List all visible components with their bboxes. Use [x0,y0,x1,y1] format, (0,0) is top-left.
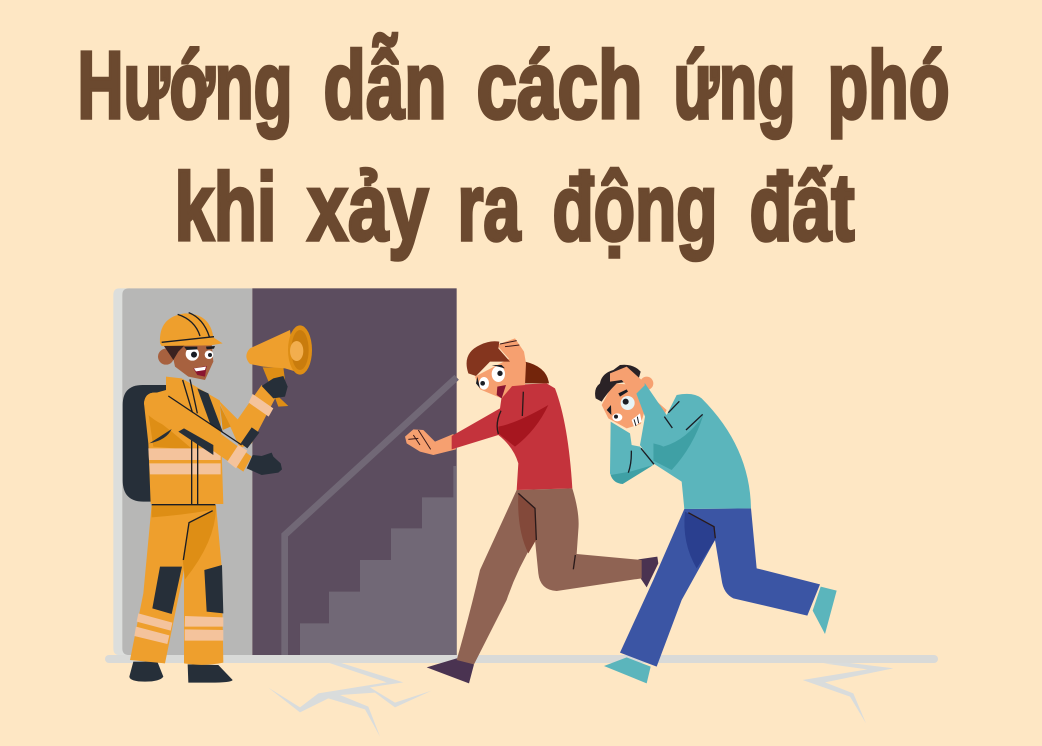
shoes [604,587,837,683]
front glove [247,453,282,475]
face [475,358,512,398]
title: ra [458,154,521,261]
title: đất [750,154,854,261]
far arm [610,422,655,483]
head [602,383,645,428]
raised arm [218,385,276,448]
shoes [427,557,658,683]
mouth [497,385,506,398]
ear [640,377,653,390]
mouth [193,366,207,377]
stair handrail [285,377,457,655]
helmet [160,313,223,346]
ground crack right [803,663,893,723]
eyes [476,365,505,390]
head [170,343,213,380]
title: khi [174,154,276,261]
hair [467,341,510,376]
eyes and teeth [607,389,642,427]
title: động [552,154,718,261]
woman running [405,338,658,683]
outstretched hand [405,429,456,455]
raised hand [610,367,645,395]
sweater [640,394,751,509]
megaphone [246,325,312,407]
man running [595,365,837,683]
firefighter [123,313,312,683]
title: ứng [674,32,796,139]
title [78,32,950,261]
title: xảy [308,154,428,261]
jacket [144,377,223,504]
jacket zip and strap [152,379,215,505]
title: Hướng [78,32,292,139]
hair [595,365,641,402]
title: phó [828,32,950,139]
knee pads [152,565,223,614]
backpack [123,385,168,502]
ground crack left [268,663,432,737]
raised glove [262,376,288,398]
reflective leg stripes [134,613,223,644]
sweater [452,383,572,490]
stairs [300,466,457,655]
trousers [457,488,642,664]
title: dẫn [324,32,446,139]
hair back [525,362,549,383]
raised hand [497,338,526,387]
eyes [184,346,215,361]
jacket reflective stripes [148,448,221,474]
trousers [130,505,223,665]
floor line [105,655,938,663]
trousers [620,508,820,667]
front arm [144,393,252,472]
raised arm [635,383,672,463]
boots [129,662,233,683]
title: cách [476,32,642,139]
doorway with stairs [113,288,457,655]
